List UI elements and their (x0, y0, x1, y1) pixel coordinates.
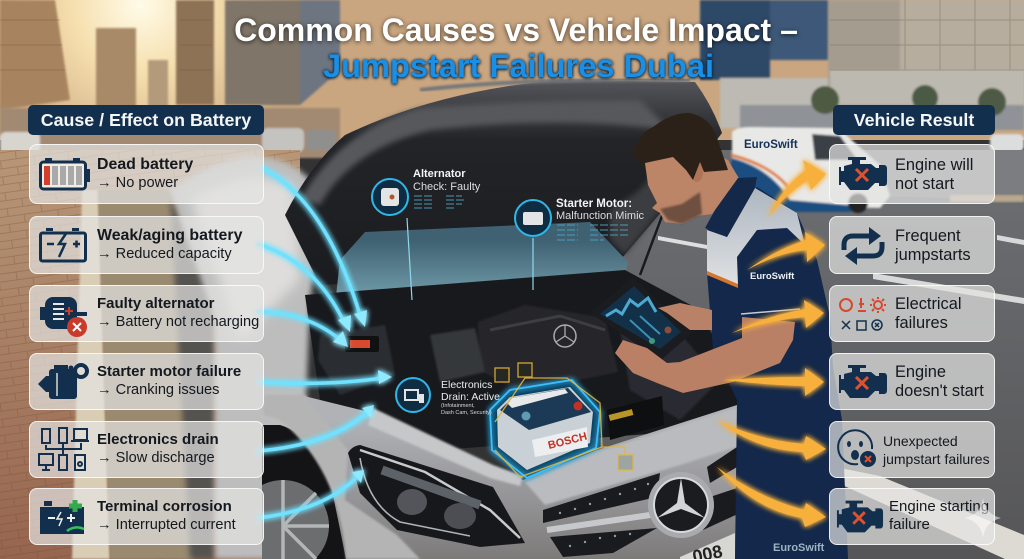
icon: engine warning (839, 157, 887, 190)
panel: engine will not start (829, 144, 995, 204)
icon: starter motor (38, 363, 89, 399)
title: Common Causes vs Vehicle Impact – (234, 12, 798, 48)
panel: faulty alternator (29, 285, 264, 342)
text: engine will not start (895, 156, 973, 192)
heading: vehicle result (833, 105, 995, 135)
text: starter motor failure: → Cranking issues (97, 382, 219, 398)
panel: terminal corrosion (29, 488, 264, 545)
text: unexpected jumpstart failures: Unexpected (883, 433, 958, 449)
icon: dead battery (39, 158, 90, 190)
panel: electronics drain (29, 421, 264, 478)
text: frequent jumpstarts (894, 227, 971, 264)
text: electronics drain: Electronics drain (97, 431, 219, 448)
face (645, 148, 740, 224)
text: engine doesn't start (895, 363, 984, 400)
yellow circuit outline around battery (495, 363, 633, 477)
text: electronics drain (97, 431, 219, 466)
heading: vehicle result: Vehicle Result (854, 110, 974, 130)
text: unexpected jumpstart failures (882, 433, 990, 467)
text: engine starting failure (889, 498, 989, 533)
text: terminal corrosion: Terminal corrosion (97, 498, 232, 515)
text: frequent jumpstarts: jumpstarts (895, 246, 971, 264)
grille with star emblem (543, 447, 740, 559)
forearm and lower hand (615, 317, 795, 393)
callout: starter motor (515, 198, 645, 290)
orange arrows: impact to vehicle results (717, 160, 826, 527)
text: engine starting failure: failure (889, 516, 930, 533)
watermark sparkle (966, 498, 1001, 536)
text: unexpected jumpstart failures: jumpstart failures (883, 451, 990, 467)
service van: EuroSwift (744, 139, 798, 151)
car body: fender and reflections (170, 157, 325, 559)
upper hand on tablet (658, 303, 712, 330)
text: electrical failures: Electrical (895, 295, 962, 313)
battery (490, 380, 600, 478)
callout: electronics drain: Electronics (441, 379, 492, 391)
callout: starter motor: Malfunction Mimic (556, 210, 645, 222)
icon: electronics (38, 427, 89, 471)
panel: engine starting failure (829, 488, 995, 545)
icon: warning lights (839, 297, 886, 331)
callout: alternator: Check: Faulty (413, 181, 481, 193)
text: starter motor failure: Starter motor failure (97, 363, 241, 380)
callout: alternator: Alternator (413, 168, 466, 180)
sky and distant buildings (0, 0, 1024, 140)
callout: starter motor: Starter Motor: (556, 198, 632, 210)
title: Jumpstart Failures Dubai (323, 47, 714, 84)
text: dead battery (97, 156, 194, 191)
title (232, 12, 799, 87)
text: weak battery: Weak/aging battery (97, 227, 242, 244)
text: engine doesn't start: doesn't start (895, 382, 984, 400)
open bonnet underside (285, 80, 722, 305)
icon: faulty alternator (40, 297, 87, 337)
text: weak battery (97, 227, 242, 262)
panel: engine doesn't start (829, 353, 995, 410)
text: weak battery: → Reduced capacity (97, 246, 232, 262)
text: faulty alternator: Faulty alternator (97, 295, 215, 312)
panel: weak battery (29, 216, 264, 274)
engine bay (305, 270, 745, 450)
text: engine doesn't start: Engine (895, 363, 946, 381)
text: starter motor failure (97, 363, 241, 398)
icon: engine warning (839, 365, 887, 398)
hair (632, 113, 728, 180)
icon: corroded terminal (40, 500, 84, 534)
text: engine starting failure: Engine starting (889, 498, 989, 515)
icon: repeat arrows (842, 227, 884, 265)
callout: electronics drain: Dash Cam, Security) (441, 410, 492, 416)
text: dead battery: Dead battery (97, 156, 193, 173)
callout: electronics drain: (Infotainment, (441, 403, 475, 409)
callout: electronics drain (396, 378, 500, 416)
cyan arrows: causes to engine bay (258, 168, 392, 518)
callout: alternator (372, 168, 481, 300)
icon: surprised face (837, 429, 876, 467)
torso and sleeve (707, 187, 848, 559)
panel: electrical failures (829, 285, 995, 342)
street with parked cars (0, 108, 1024, 158)
text: electrical failures: failures (895, 314, 948, 332)
mechanic: EuroSwift (750, 271, 795, 282)
text: electrical failures (895, 295, 962, 332)
text: faulty alternator (97, 295, 259, 330)
brick pavement and kerb (0, 150, 300, 559)
panel: starter motor failure (29, 353, 264, 410)
panel: dead battery (29, 144, 264, 204)
collar (705, 177, 757, 237)
callout: electronics drain: Drain: Active (441, 391, 500, 403)
headlight (348, 445, 525, 547)
text: engine will not start: Engine will (895, 156, 973, 174)
icon: weak battery (39, 228, 87, 262)
text: terminal corrosion: → Interrupted current (97, 517, 236, 533)
tablet (590, 277, 692, 360)
car front bumper and wheel (262, 394, 737, 559)
text: terminal corrosion (97, 498, 236, 533)
text: electronics drain: → Slow discharge (97, 450, 215, 466)
service van (730, 127, 890, 213)
icon: engine warning (836, 500, 884, 532)
mechanic (615, 113, 848, 559)
text: faulty alternator: → Battery not recharging (97, 314, 259, 330)
text: dead battery: → No power (97, 175, 178, 191)
battery: BOSCH (547, 431, 588, 452)
panel: frequent jumpstarts (829, 216, 995, 274)
mechanic: EuroSwift (773, 542, 825, 554)
text: engine will not start: not start (895, 174, 954, 192)
panel: unexpected jumpstart failures (829, 421, 995, 478)
text: frequent jumpstarts: Frequent (895, 227, 961, 245)
heading: cause / effect on battery (28, 105, 264, 135)
heading: cause / effect on battery: Cause / Effect on Battery (41, 110, 251, 130)
road on the right (600, 150, 1024, 559)
